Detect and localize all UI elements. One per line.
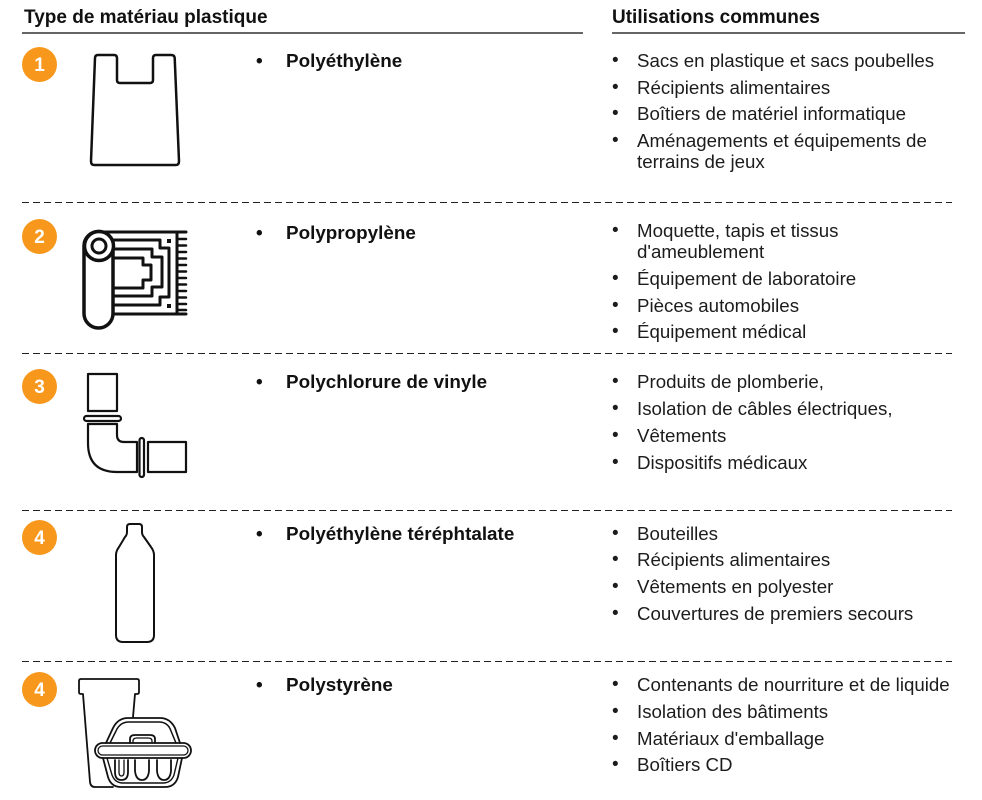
uses: PVC: Dispositifs médicaux [637,452,807,473]
uses: PET: Couvertures de premiers secours [637,603,913,624]
uses: polypropylene [612,220,856,342]
uses: PVC: Vêtements [637,425,726,446]
uses: polypropylene: Moquette, tapis et tissus [637,220,839,241]
number badge 4: 4 [34,528,45,549]
uses: PET [612,523,913,624]
uses: polypropylene: Équipement médical [637,321,806,342]
icon: rolled carpet [84,232,186,328]
number badge 3: 3 [34,377,45,398]
uses: PVC [612,371,893,473]
material: polypropylene: Polypropylène [286,222,416,243]
uses: PET: Bouteilles [637,523,718,544]
material: PET: Polyéthylène téréphtalate [286,523,514,544]
material: polyethylene: Polyéthylène [286,50,402,71]
uses: polypropylene: d'ameublement [637,241,764,262]
number badge 2 [22,219,57,254]
uses: polystyrene [612,674,950,775]
uses: polypropylene: Pièces automobiles [637,295,799,316]
uses: polyethylene: Boîtiers de matériel informatique [637,103,906,124]
material: PVC: • [256,372,263,393]
uses: polystyrene: Boîtiers CD [637,754,733,775]
uses: PET: Vêtements en polyester [637,576,833,597]
heading: common uses: Utilisations communes [612,7,820,28]
icon: plastic bag [91,55,179,165]
number badge 1: 1 [34,55,45,76]
uses: polystyrene: Isolation des bâtiments [637,701,828,722]
uses: PVC: Isolation de câbles électriques, [637,398,893,419]
material: polystyrene: Polystyrène [286,674,393,695]
icon: pipe elbow [84,374,186,477]
material: PET: • [256,524,263,545]
uses: polyethylene: Récipients alimentaires [637,77,830,98]
number badge 4 [22,520,57,555]
material: polystyrene: • [256,675,263,696]
uses: polyethylene [612,50,934,172]
number badge 4 (polystyrene): 4 [34,680,45,701]
material: PVC: Polychlorure de vinyle [286,371,487,392]
material: polypropylene: • [256,223,263,244]
number badge 2: 2 [34,227,45,248]
uses: polyethylene: terrains de jeux [637,151,765,172]
number badge 3 [22,369,57,404]
icon: cup and food container [79,679,191,787]
uses: polypropylene: Équipement de laboratoire [637,268,856,289]
heading: plastic material type: Type de matériau plastique [24,7,268,28]
uses: polystyrene: Matériaux d'emballage [637,728,824,749]
uses: polyethylene: Sacs en plastique et sacs poubelles [637,50,934,71]
uses: PVC: Produits de plomberie, [637,371,824,392]
number badge 1 [22,47,57,82]
uses: polystyrene: Contenants de nourriture et de liquide [637,674,950,695]
icon: bottle [116,524,154,642]
uses: PET: Récipients alimentaires [637,549,830,570]
uses: polyethylene: Aménagements et équipements de [637,130,927,151]
material: polyethylene: • [256,51,263,72]
number badge 4 (polystyrene) [22,672,57,707]
